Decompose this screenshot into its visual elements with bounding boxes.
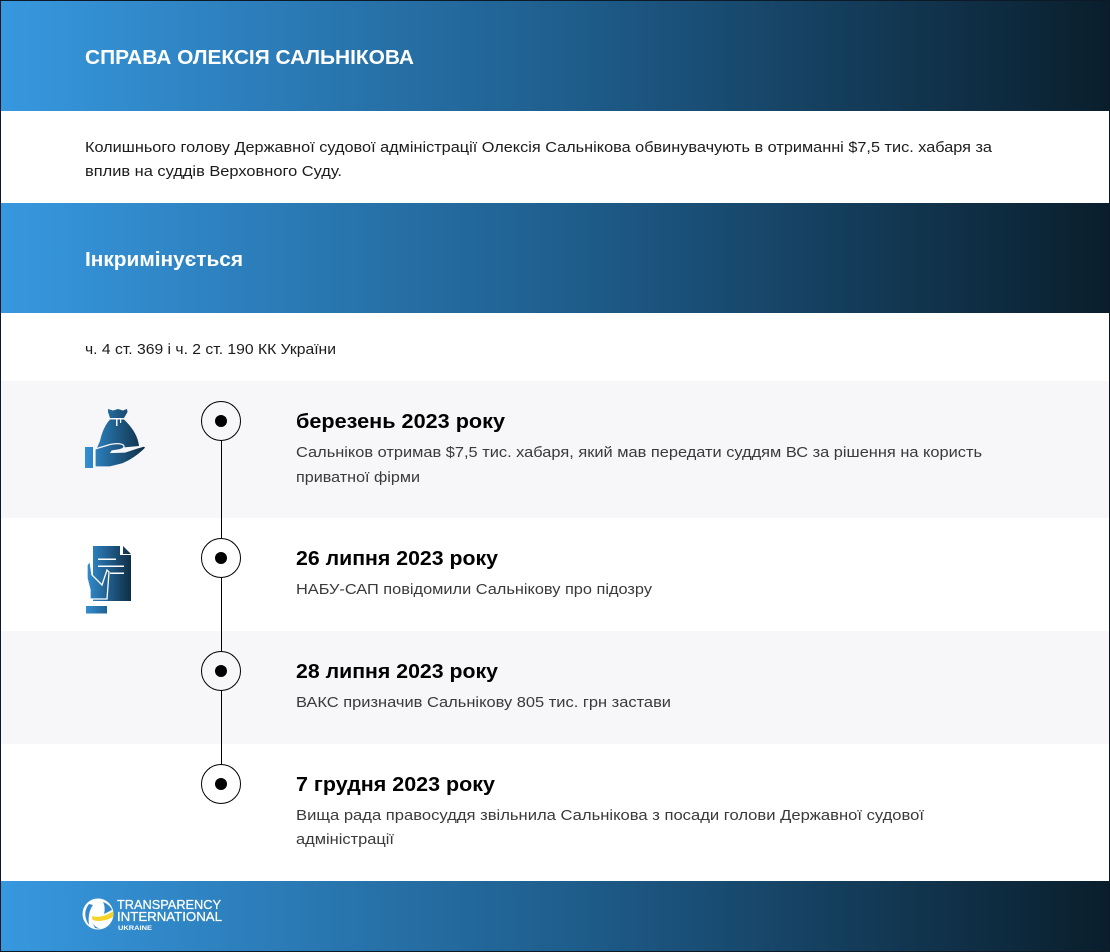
logo: Transparency International Ukraine: UKRAINE — [118, 925, 153, 932]
panel: title header — [0, 0, 1110, 111]
timeline marker 3 — [202, 652, 240, 690]
text block: case summary — [85, 140, 993, 180]
icon: hand holding document — [86, 546, 131, 614]
panel: row 28 July background — [0, 631, 1110, 744]
event: 28 July 2023 — [296, 661, 671, 711]
event: 7 December 2023: адміністрації — [296, 832, 394, 848]
icon: money bag on hand — [85, 409, 146, 468]
event: 28 July 2023: ВАКС призначив Сальнікову 805 тис. грн застави — [296, 695, 671, 711]
logo: Transparency International Ukraine: INTERNATIONAL — [117, 909, 222, 924]
timeline marker 4 — [202, 764, 240, 804]
heading: charges: Інкримінується — [85, 249, 243, 271]
timeline marker 2 — [202, 538, 240, 578]
event: 7 December 2023: Вища рада правосуддя звільнила Сальнікова з посади голови Державної судової — [296, 808, 924, 824]
event: 7 December 2023 — [296, 774, 924, 848]
event: March 2023: Сальніков отримав $7,5 тис. хабаря, який мав передати суддям ВС за рішення на користь — [296, 445, 982, 461]
event: 7 December 2023: 7 грудня 2023 року — [296, 774, 496, 796]
panel: row March 2023 background — [0, 381, 1110, 518]
logo: Transparency International Ukraine — [82, 897, 222, 932]
timeline line — [220, 420, 222, 785]
event: March 2023: березень 2023 року — [296, 411, 506, 433]
text block: articles: ч. 4 ст. 369 і ч. 2 ст. 190 КК України — [85, 342, 336, 358]
event: 26 July 2023 — [296, 548, 653, 598]
event: March 2023: приватної фірми — [296, 470, 420, 486]
panel: charges header — [0, 203, 1110, 313]
text block: case summary: Колишнього голову Державної судової адміністрації Олексія Сальнікова обвинувачують в отриманні $7,5 тис. хабаря за — [85, 140, 993, 156]
timeline marker 1 — [202, 402, 240, 440]
event: 26 July 2023: НАБУ-САП повідомили Сальнікову про підозру — [296, 582, 653, 598]
panel: footer — [0, 881, 1110, 952]
event: 26 July 2023: 26 липня 2023 року — [296, 548, 499, 570]
text block: case summary: вплив на суддів Верховного Суду. — [85, 164, 342, 180]
title: СПРАВА ОЛЕКСІЯ САЛЬНІКОВА — [85, 46, 414, 69]
logo: Transparency International Ukraine: TRANSPARENCY — [117, 897, 221, 912]
event: March 2023 — [296, 411, 982, 486]
event: 28 July 2023: 28 липня 2023 року — [296, 661, 499, 683]
